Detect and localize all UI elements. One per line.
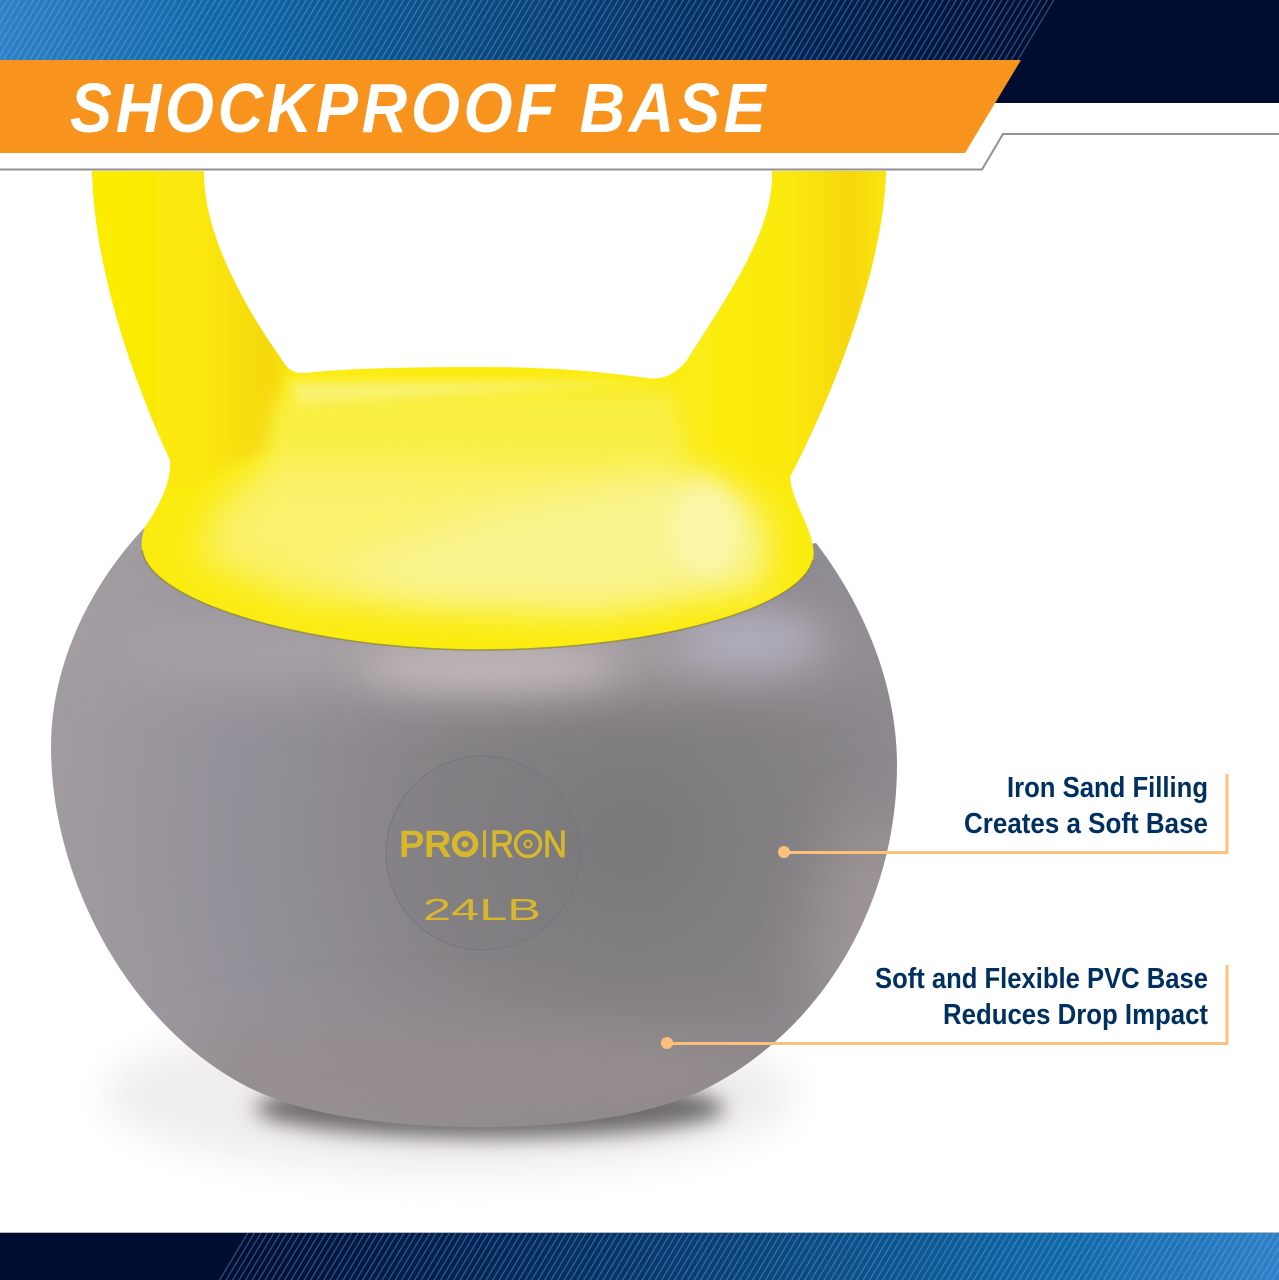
title: SHOCKPROOF BASE bbox=[70, 70, 768, 148]
kettlebell bbox=[51, 140, 940, 1175]
callout: iron sand filling: Iron Sand Filling bbox=[1007, 772, 1208, 804]
callout: PVC base: Soft and Flexible PVC Base bbox=[875, 963, 1208, 995]
callout: PVC base bbox=[661, 963, 1227, 1049]
callout: iron sand filling: Creates a Soft Base bbox=[964, 808, 1208, 840]
logo: PROIRON: R bbox=[490, 824, 514, 866]
logo: PROIRON: N bbox=[543, 824, 567, 866]
callout: PVC base: Reduces Drop Impact bbox=[943, 999, 1208, 1031]
grey ball body bbox=[51, 527, 940, 1127]
logo badge bbox=[386, 756, 580, 950]
footer band with diagonal stripes bbox=[0, 1232, 1279, 1280]
title banner bbox=[0, 60, 1021, 153]
floor shadow bbox=[105, 1015, 795, 1175]
callout: iron sand filling bbox=[778, 772, 1227, 858]
yellow handle and collar bbox=[92, 171, 886, 651]
logo: PROIRON: I bbox=[481, 824, 488, 866]
logo: PROIRON bbox=[399, 824, 567, 866]
header white strip with grey keyline bbox=[0, 103, 1279, 170]
weight label: 24LB bbox=[423, 892, 541, 927]
logo: PROIRON: P bbox=[399, 824, 424, 866]
logo: PROIRON: R bbox=[424, 824, 451, 866]
header band with diagonal stripes bbox=[0, 0, 1279, 104]
